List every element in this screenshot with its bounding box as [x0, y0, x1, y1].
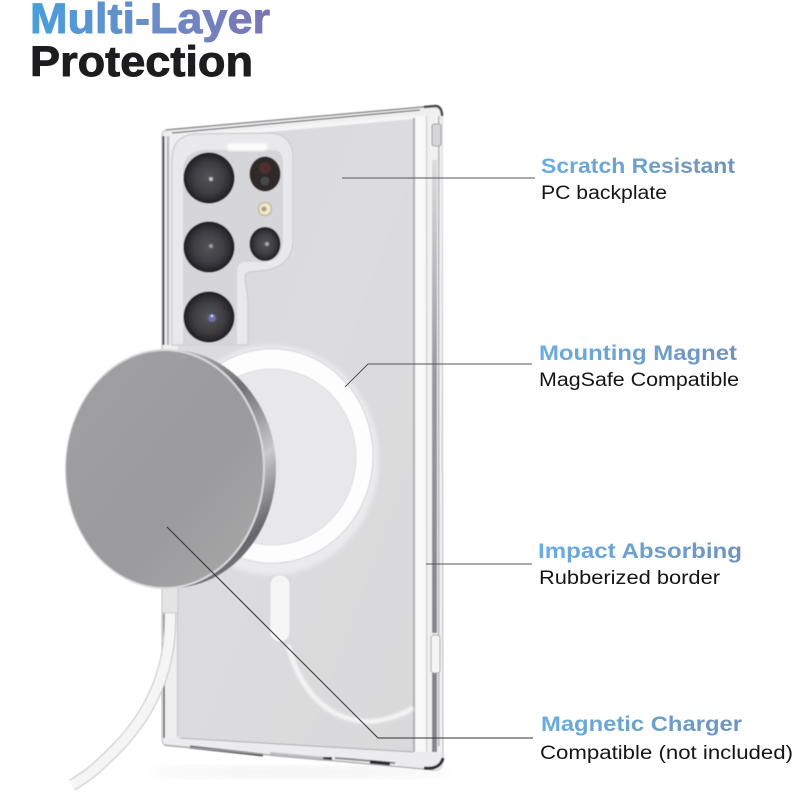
callout: impact absorbing — [538, 539, 742, 589]
right border band — [413, 106, 442, 754]
lens: lower — [184, 292, 234, 342]
floor shadow — [150, 766, 450, 778]
callout: impact absorbing: Impact Absorbing — [538, 539, 742, 563]
leader line: mounting magnet — [345, 364, 532, 387]
lens: small — [250, 227, 280, 261]
camera island — [183, 150, 283, 345]
magnetic charger puck — [65, 349, 276, 589]
callout: scratch resistant — [541, 154, 735, 204]
callout: impact absorbing: Rubberized border — [539, 568, 721, 589]
lens: middle — [184, 222, 234, 272]
back panel — [178, 119, 413, 752]
white swoosh — [288, 645, 413, 721]
top edge — [166, 106, 434, 138]
lens: main — [184, 152, 234, 204]
leader line: magnetic charger — [167, 527, 533, 738]
title — [30, 0, 270, 86]
title: Protection — [30, 39, 253, 86]
camera bump frame — [172, 133, 293, 345]
leader line: impact absorbing — [426, 563, 532, 565]
phone case — [65, 106, 450, 785]
callout: scratch resistant: PC backplate — [541, 183, 667, 204]
leader line: scratch resistant — [342, 177, 535, 179]
alignment slot — [270, 575, 290, 642]
flash — [258, 202, 272, 216]
left edge — [164, 136, 178, 738]
callout: mounting magnet: MagSafe Compatible — [539, 370, 739, 391]
magnet ring — [165, 345, 379, 575]
callout: magnetic charger: Magnetic Charger — [541, 712, 743, 736]
cable — [72, 585, 178, 785]
lens: periscope — [250, 156, 280, 192]
callout: magnetic charger: Compatible (not included) — [540, 743, 793, 764]
callout: mounting magnet: Mounting Magnet — [539, 341, 737, 365]
callout: magnetic charger — [540, 712, 793, 764]
callout: scratch resistant: Scratch Resistant — [541, 154, 735, 178]
bottom edge — [162, 737, 443, 770]
case body — [162, 106, 443, 770]
callout: mounting magnet — [539, 341, 739, 391]
